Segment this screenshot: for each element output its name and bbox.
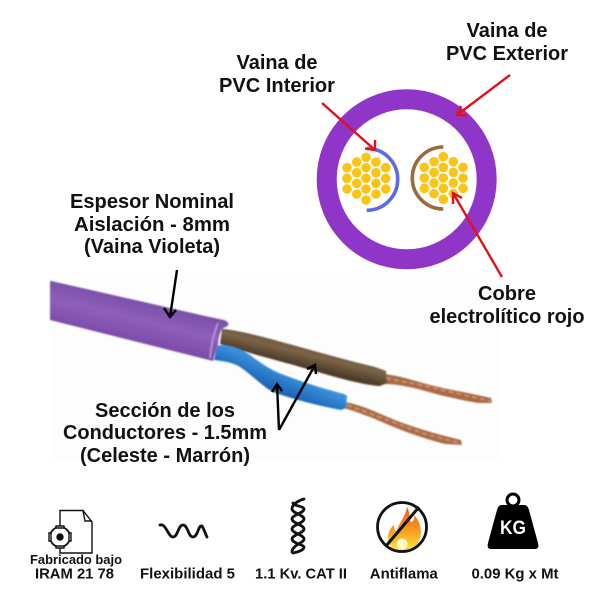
arrow: to blue conductor [272,384,282,430]
callout: Vaina de PVC Interior [219,52,335,97]
callout: Cobre electrolítico rojo [430,283,584,328]
arrow: to copper [453,193,502,277]
panel: cable photo [50,278,500,460]
label: Antiflama: Antiflama [370,566,439,582]
callout: Espesor Nominal: (Vaina Violeta) [84,235,220,258]
photo background [50,278,500,460]
callout: Vaina de PVC Exterior: PVC Exterior [446,43,568,65]
blue conductor [214,345,347,410]
brown conductor [220,329,387,386]
inner sheath: blue arc [367,148,398,210]
label: Fabricado bajo IRAM 21 78: IRAM 21 78 [35,566,114,582]
callout: Vaina de PVC Interior: PVC Interior [219,75,335,97]
label: Fabricado bajo IRAM 21 78 [30,552,122,582]
callout: Sección de los Conductores: Sección de los [95,399,235,422]
callout: Vaina de PVC Exterior [446,20,568,65]
arrow: to violet sheath [164,270,177,317]
arrow: to brown conductor [279,365,316,430]
panel: cross-section diagram [327,99,487,259]
outer PVC sheath ring [327,99,487,259]
arrow: to inner sheath [322,103,375,150]
label: 1.1 Kv. CAT II: 1.1 Kv. CAT II [255,566,347,582]
copper wire: brown conductor [384,374,492,403]
icon: IRAM document [49,510,92,553]
callout: Cobre electrolítico rojo: Cobre [478,283,536,305]
icon: KG weight: KG [500,518,526,539]
icon: no-flame [378,502,426,552]
callout: Espesor Nominal: Espesor Nominal [70,190,234,213]
copper wire: blue conductor [343,402,462,445]
callout: Espesor Nominal [70,190,234,258]
label: Fabricado bajo IRAM 21 78: Fabricado bajo [30,552,122,567]
copper strands: right conductor [420,152,468,204]
icon: flexibility wave [160,525,207,537]
sheath cut edge highlight [210,323,218,358]
callout: Vaina de PVC Interior: Vaina de [236,52,318,74]
icon: KG weight [488,494,538,549]
label: 0.09 Kg x Mt: 0.09 Kg x Mt [472,566,559,582]
callout: Cobre electrolítico rojo: electrolítico rojo [430,306,584,328]
callout: Sección de los Conductores [63,399,267,467]
callout: Vaina de PVC Exterior: Vaina de [466,20,548,42]
inner sheath: brown arc [412,147,443,209]
arrow: to outer sheath [457,75,510,116]
violet outer sheath [50,281,228,361]
callout: Sección de los Conductores: (Celeste - Marrón) [80,444,250,467]
label: Flexibilidad 5: Flexibilidad 5 [140,566,235,582]
callout: Espesor Nominal: Aislación - 8mm [74,213,230,236]
copper strands: left conductor [342,152,391,205]
callout: Sección de los Conductores: Conductores - 1.5mm [63,421,267,444]
icon: twisted helix [292,499,304,553]
